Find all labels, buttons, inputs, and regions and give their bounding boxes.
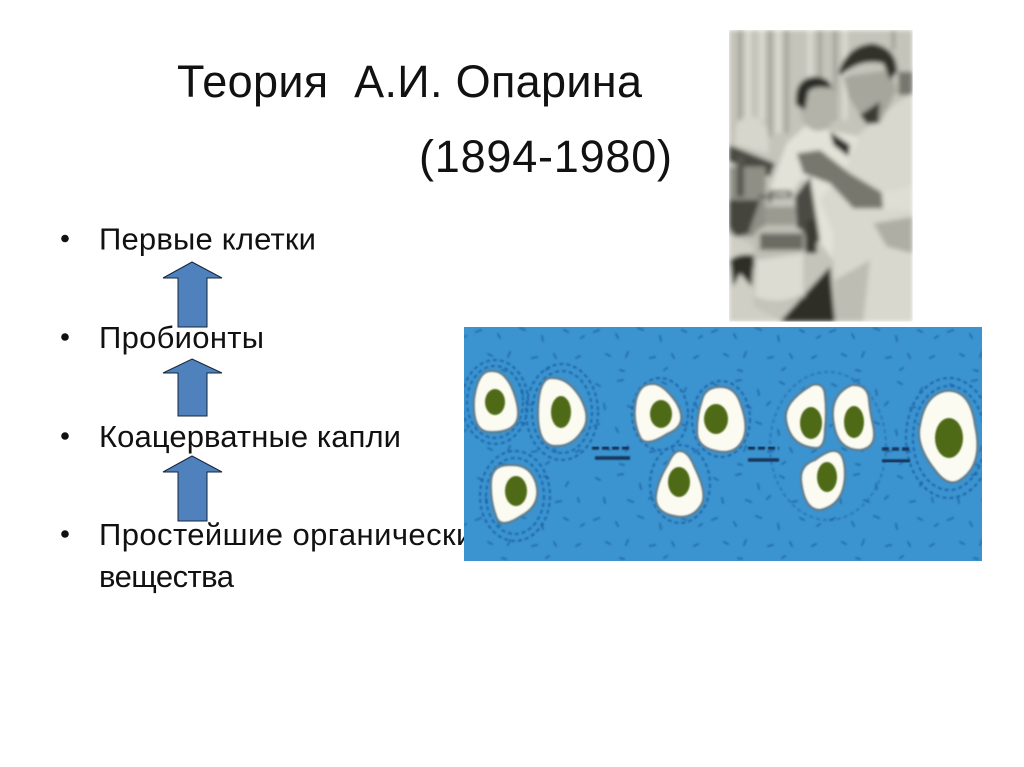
blue background	[464, 327, 982, 561]
bullet list: вещества	[99, 559, 235, 594]
bullet list: Пробионты	[99, 320, 264, 355]
title: (1894-1980)	[419, 131, 672, 182]
flask	[735, 116, 768, 153]
bullet list	[61, 222, 491, 594]
right man head	[843, 70, 897, 123]
droplets	[474, 371, 977, 523]
illustration: coacervate droplets on blue	[462, 327, 992, 561]
bench and jar	[729, 232, 772, 320]
arm and hand	[797, 150, 883, 208]
membrane halos	[462, 360, 992, 541]
bullet list: Простейшие органические	[99, 517, 491, 552]
arrow: probionts from coacervates	[163, 359, 222, 416]
bullet list: Коацерватные капли	[99, 419, 401, 454]
bullet list: Первые клетки	[99, 222, 316, 256]
arrow: first cells from probionts	[163, 262, 222, 327]
double arrows between stages	[592, 448, 910, 461]
title: Теория А.И. Опарина	[177, 56, 643, 107]
title	[177, 56, 672, 182]
left man head	[800, 86, 832, 132]
nuclei	[485, 389, 963, 506]
left man coat	[770, 125, 860, 260]
right man coat	[820, 93, 913, 322]
arrow: coacervates from simple organics	[163, 456, 222, 521]
photo: two scientists in laboratory	[729, 30, 913, 322]
